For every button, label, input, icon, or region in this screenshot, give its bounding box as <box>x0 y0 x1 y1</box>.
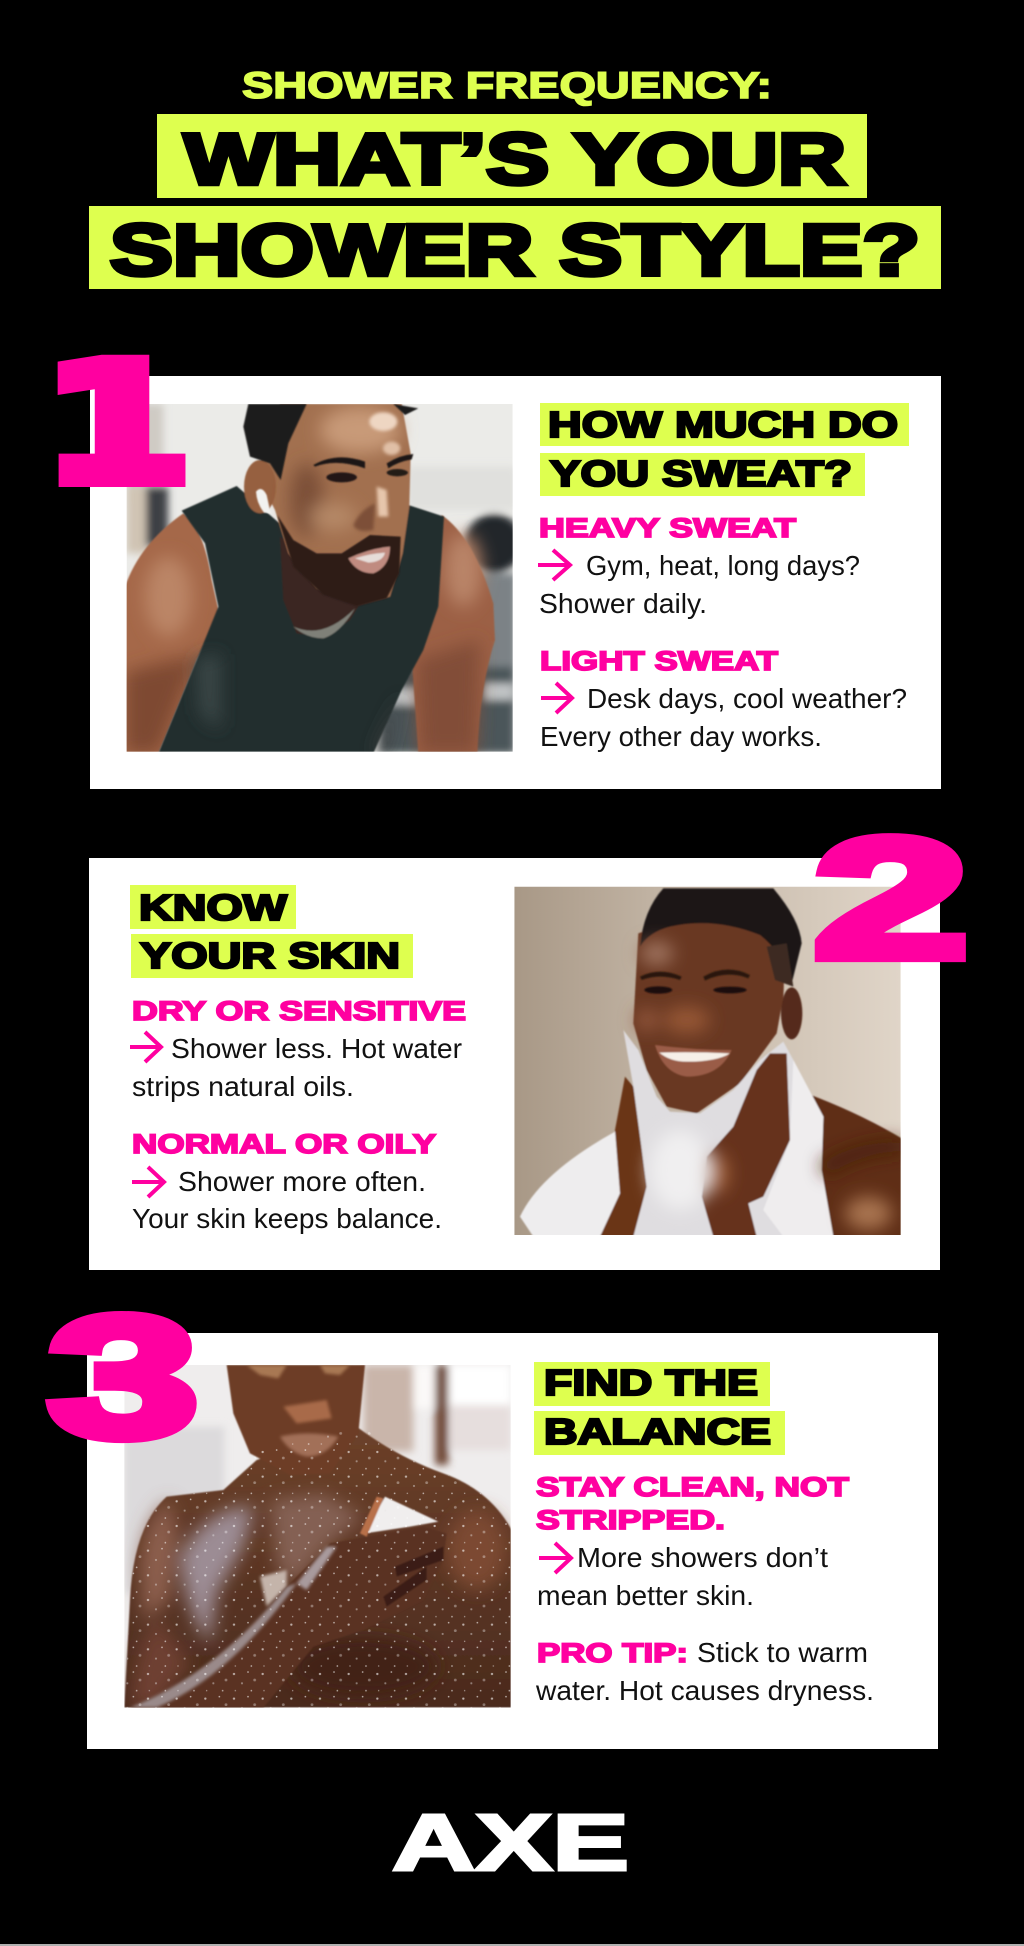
heavy sweat tip: Shower daily. <box>539 588 707 619</box>
heavy sweat tip <box>538 513 860 619</box>
pro tip: PRO TIP: <box>537 1638 688 1668</box>
dry or sensitive tip: Shower less. Hot water <box>171 1033 462 1064</box>
stay clean tip: mean better skin. <box>537 1580 754 1611</box>
normal or oily tip: NORMAL OR OILY <box>132 1129 436 1159</box>
heading highlight: YOUR SKIN <box>140 935 400 976</box>
title block <box>89 65 941 291</box>
heading highlight: BALANCE <box>544 1411 771 1452</box>
dry or sensitive tip: DRY OR SENSITIVE <box>132 996 466 1026</box>
dry or sensitive tip <box>130 996 466 1102</box>
light sweat tip <box>540 646 907 752</box>
eyebrow: shower frequency: SHOWER FREQUENCY: <box>242 65 772 106</box>
pro tip <box>535 1637 874 1706</box>
heading highlight: KNOW <box>139 887 287 928</box>
light sweat tip: LIGHT SWEAT <box>540 646 779 676</box>
text column <box>534 1362 874 1706</box>
panel 1: how much do you sweat <box>90 376 941 789</box>
dry or sensitive tip: strips natural oils. <box>132 1071 354 1102</box>
normal or oily tip <box>132 1129 442 1234</box>
heading highlight <box>540 403 909 496</box>
number 1: 1 <box>41 328 193 520</box>
stay clean tip: More showers don’t <box>577 1542 828 1573</box>
photo: man soaping in the shower <box>124 1365 512 1708</box>
title highlight line 2 <box>89 206 941 291</box>
photo: smiling man with towel <box>514 887 902 1237</box>
title highlight line 1 <box>157 114 867 200</box>
panel 2: know your skin <box>89 858 940 1270</box>
text column <box>538 403 909 752</box>
stay clean tip: STAY CLEAN, NOT <box>536 1472 850 1502</box>
water droplets <box>124 1427 511 1708</box>
stay clean tip <box>536 1472 850 1611</box>
number 3: 3 <box>48 1281 198 1473</box>
title highlight line 2: SHOWER STYLE? <box>110 211 920 291</box>
pro tip: Stick to warm <box>697 1637 868 1668</box>
heavy sweat tip: Gym, heat, long days? <box>586 550 860 581</box>
photo: sweating man at gym <box>125 404 523 753</box>
panel 3: find the balance <box>87 1333 938 1749</box>
heavy sweat tip: HEAVY SWEAT <box>539 513 797 543</box>
logo: AXE: AXE <box>392 1798 629 1887</box>
heading highlight <box>534 1362 785 1455</box>
heading highlight: YOU SWEAT? <box>550 453 852 494</box>
stay clean tip: STRIPPED. <box>536 1505 725 1535</box>
normal or oily tip: Your skin keeps balance. <box>132 1203 442 1234</box>
heading highlight: HOW MUCH DO <box>548 404 898 445</box>
light sweat tip: Every other day works. <box>540 721 822 752</box>
number 2: 2 <box>814 803 969 993</box>
pro tip: water. Hot causes dryness. <box>535 1675 874 1706</box>
text column <box>130 885 466 1234</box>
title highlight line 1: WHAT’S YOUR <box>184 120 846 200</box>
light sweat tip: Desk days, cool weather? <box>587 683 907 714</box>
heading highlight <box>130 885 413 978</box>
heading highlight: FIND THE <box>544 1362 758 1403</box>
normal or oily tip: Shower more often. <box>178 1166 426 1197</box>
